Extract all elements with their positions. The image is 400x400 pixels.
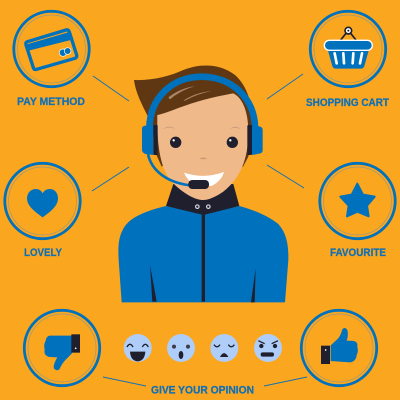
icon: basket (324, 27, 372, 69)
emoji: angry (254, 334, 282, 362)
agent figure (118, 65, 288, 302)
panel: thumbs up (301, 310, 377, 386)
panel: favourite (320, 163, 395, 259)
label: give your opinion: GIVE YOUR OPINION (151, 384, 254, 396)
label: lovely: LOVELY (24, 247, 63, 259)
label: favourite: FAVOURITE (330, 247, 386, 259)
emoji: laughing (124, 334, 152, 362)
microphone (188, 180, 209, 189)
emoji: surprised (167, 334, 195, 362)
panel: shopping cart (306, 11, 389, 109)
face (157, 93, 248, 200)
earcups (142, 125, 153, 155)
head with headset (134, 65, 263, 200)
label: pay method: PAY METHOD (17, 96, 85, 108)
icon: heart (27, 189, 58, 217)
panel: pay method (14, 11, 89, 108)
smile (184, 172, 224, 186)
eyebrows (163, 126, 241, 129)
icon: star (340, 184, 375, 216)
hair (134, 65, 253, 167)
jacket and collar (118, 184, 288, 302)
hair highlights (168, 86, 212, 101)
panel: thumbs down (24, 310, 100, 386)
eyes (170, 137, 181, 148)
emoji: sad (210, 334, 238, 362)
connector lines (92, 74, 307, 386)
label: shopping cart: SHOPPING CART (306, 97, 389, 109)
icon: thumbs up (321, 328, 358, 364)
panel: lovely (5, 163, 80, 259)
headband (149, 77, 255, 130)
icon: thumbs down (44, 334, 80, 370)
nose (199, 157, 207, 159)
mic boom (148, 154, 190, 185)
icon: credit card (26, 30, 77, 69)
